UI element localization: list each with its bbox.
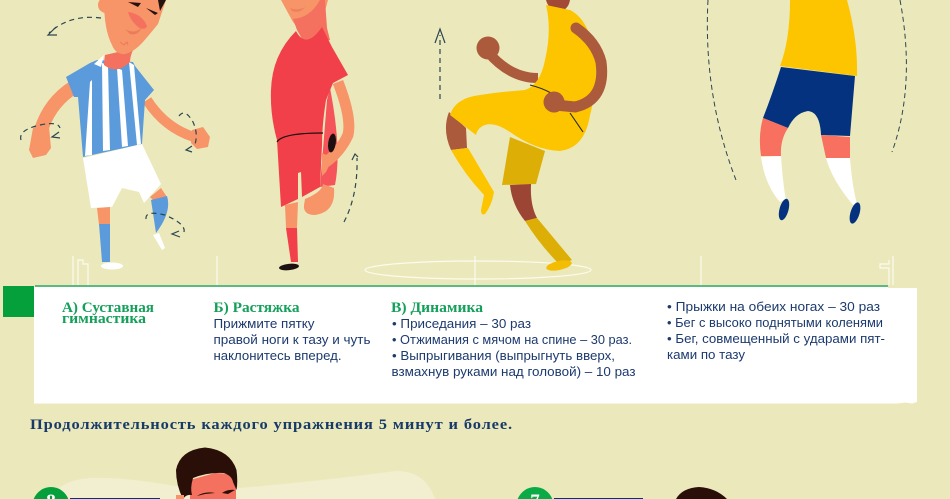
pale tip background xyxy=(50,471,435,499)
text block: C continued: • Бег, совмещенный с ударами пят- xyxy=(667,332,885,346)
player B motion arrow xyxy=(344,154,358,222)
player D: jump xyxy=(707,0,906,225)
player D dashed jump arcs xyxy=(707,0,906,180)
lower panel: tip 8 xyxy=(34,448,435,499)
player A jersey xyxy=(66,60,154,157)
text block: C: • Отжимания с мячом на спине – 30 раз. xyxy=(392,333,632,347)
player B head xyxy=(281,0,328,30)
text block: B xyxy=(214,300,370,363)
text block: C: взмахнув руками над головой) – 10 раз xyxy=(392,365,636,379)
number badge 8 xyxy=(34,487,68,499)
player C waist line xyxy=(530,85,583,132)
panel background xyxy=(34,287,917,404)
duration note: Продолжительность каждого упражнения 5 минут и более. xyxy=(30,417,513,433)
player A legs xyxy=(97,188,167,225)
player A shorts xyxy=(83,144,161,208)
player B arm xyxy=(326,82,349,162)
text block: A: А) Суставная xyxy=(62,300,154,316)
green line xyxy=(35,285,888,287)
player B raised leg xyxy=(304,184,334,215)
player C: dynamics xyxy=(435,0,602,273)
player A motion arrows xyxy=(21,17,196,237)
text block: C: • Приседания – 30 раз xyxy=(392,317,531,331)
player B: stretch xyxy=(271,0,358,271)
pitch markings xyxy=(73,256,893,285)
player D shirt xyxy=(780,0,857,76)
text block: C continued xyxy=(667,300,885,362)
player D shoes xyxy=(777,198,791,221)
text block: C continued: • Прыжки на обеих ногах – 30 раз xyxy=(667,300,880,314)
text block: B: правой ноги к тазу и чуть xyxy=(214,333,370,347)
player B back leg xyxy=(320,88,338,187)
player A: joint gymnastics xyxy=(21,0,210,270)
player C raised shin xyxy=(446,112,467,150)
player D legs xyxy=(760,118,850,158)
footballer head xyxy=(176,448,237,499)
text block: C continued: ками по тазу xyxy=(667,348,746,362)
number badge 7 xyxy=(518,487,552,499)
player C up arrow xyxy=(435,29,445,99)
player C neck xyxy=(546,0,570,11)
player A head xyxy=(98,0,166,69)
player B shoe xyxy=(279,263,299,271)
lower panel: tip 7 xyxy=(518,487,727,499)
player B foot xyxy=(327,133,337,153)
green square xyxy=(3,286,34,317)
player C torso and thigh xyxy=(450,5,596,151)
text block: C continued: • Бег с высоко поднятыми коленями xyxy=(667,316,883,330)
player C left arm xyxy=(488,52,538,78)
text block: C xyxy=(391,300,636,379)
player C right arm xyxy=(555,28,602,107)
player B shirt and shorts xyxy=(271,27,348,207)
player A arms xyxy=(41,87,74,130)
heading rule xyxy=(70,498,160,499)
heading rule xyxy=(554,498,643,499)
text block: B: Б) Растяжка xyxy=(214,300,300,316)
text block: A: гимнастика xyxy=(62,311,147,327)
player D shorts xyxy=(763,67,855,136)
player B standing leg xyxy=(285,202,298,228)
text block: B: Прижмите пятку xyxy=(214,317,315,331)
player C standing leg xyxy=(502,137,545,185)
text block: A xyxy=(62,300,154,327)
text block: C: • Выпрыгивания (выпрыгнуть вверх, xyxy=(392,349,615,363)
panel: exercises xyxy=(3,286,917,404)
text block: B: наклонитесь вперед. xyxy=(214,349,342,363)
footballer head xyxy=(676,487,727,499)
text block: C: В) Динамика xyxy=(391,300,484,316)
